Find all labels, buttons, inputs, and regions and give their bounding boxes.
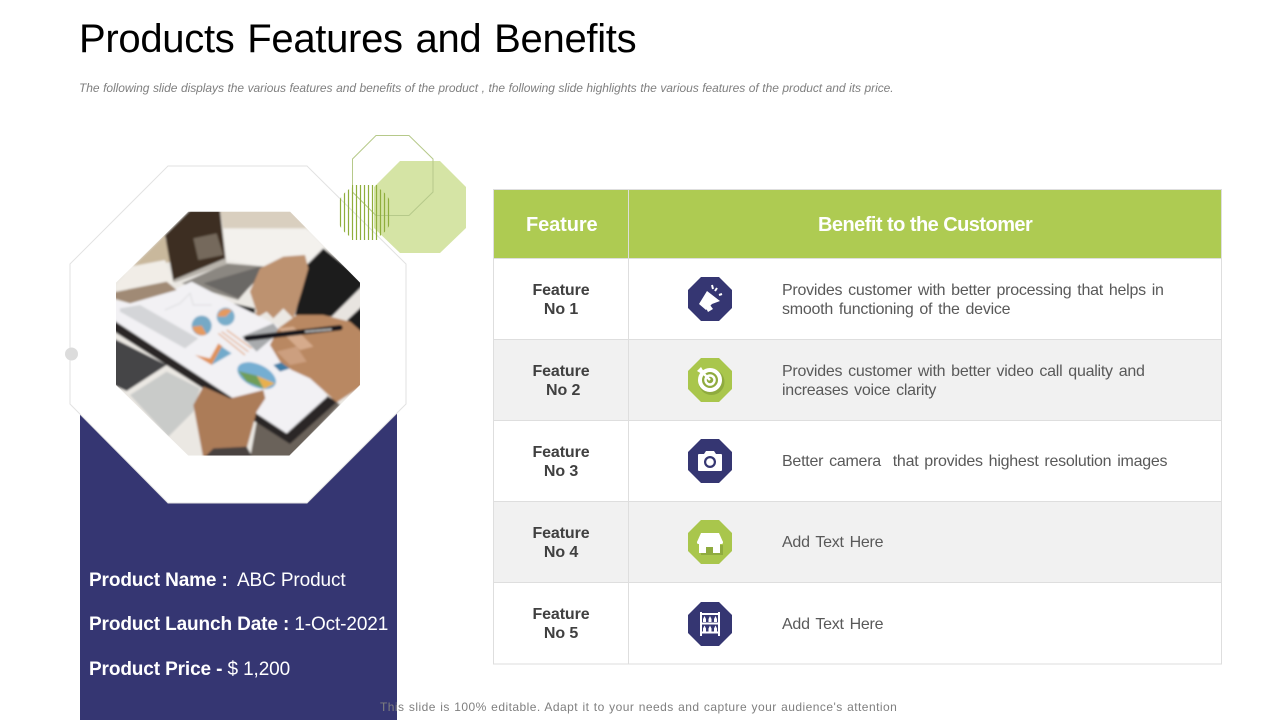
title: Products Features and Benefits [79, 17, 636, 61]
feature label 2 [532, 363, 590, 399]
header: feature: Feature [526, 214, 598, 236]
feature label 1: Feature [532, 282, 590, 299]
feature label 4 [532, 525, 590, 561]
grey dot [65, 348, 78, 360]
benefit text 5: Add Text Here [782, 616, 883, 633]
row 5 [532, 602, 883, 646]
photo: hands with clipboard [110, 205, 367, 462]
outline green octagon [352, 136, 433, 216]
table header [494, 190, 1221, 258]
subtitle: The following slide displays the various features and benefits of the product , the following slide highlights the various features of the product and its price. [79, 81, 894, 95]
product details [89, 570, 388, 680]
benefit text 2: Provides customer with better video call quality and [782, 363, 1145, 380]
white photo frame octagon [70, 166, 406, 503]
footer note: This slide is 100% editable. Adapt it to your needs and capture your audience's attention [380, 700, 897, 714]
feature label 3 [532, 444, 590, 480]
icon: store [688, 520, 732, 564]
feature label 5: Feature [532, 606, 590, 623]
icon: shelf [688, 602, 732, 646]
icon: megaphone [688, 277, 732, 321]
feature label 5 [532, 606, 590, 642]
icon: camera [688, 439, 732, 483]
feature label 1: No 1 [544, 301, 578, 318]
feature label 4: Feature [532, 525, 590, 542]
feature label 3: No 3 [544, 463, 578, 480]
feature label 1 [532, 282, 590, 318]
benefit text 2 [782, 363, 1145, 399]
panel: feature table [493, 189, 1222, 665]
benefit text 3: Better camera that provides highest resolution images [782, 453, 1167, 470]
launch date: Product Launch Date : 1-Oct-2021 [89, 614, 388, 635]
benefit text 1: Provides customer with better processing that helps in [782, 282, 1164, 299]
price: Product Price - $ 1,200 [89, 659, 290, 680]
filled green octagon [374, 161, 466, 253]
benefit text 2: increases voice clarity [782, 382, 936, 399]
header: benefit: Benefit to the Customer [818, 214, 1032, 236]
row 4 [494, 502, 1221, 582]
benefit text 4: Add Text Here [782, 534, 883, 551]
feature label 4: No 4 [544, 544, 578, 561]
navy product panel [80, 410, 397, 720]
icon: target [688, 358, 732, 402]
row 3 [532, 439, 1167, 483]
panel: product card [65, 135, 466, 720]
benefit text 1 [782, 282, 1164, 318]
striped circle [340, 185, 388, 240]
row 2 [494, 340, 1221, 420]
feature label 5: No 5 [544, 625, 578, 642]
feature label 2: Feature [532, 363, 590, 380]
feature label 2: No 2 [546, 382, 580, 399]
benefit text 1: smooth functioning of the device [782, 301, 1010, 318]
product name: Product Name : ABC Product [89, 570, 346, 591]
product graphic: octagons and photo [65, 135, 466, 504]
row 1 [532, 277, 1164, 321]
feature label 3: Feature [532, 444, 590, 461]
